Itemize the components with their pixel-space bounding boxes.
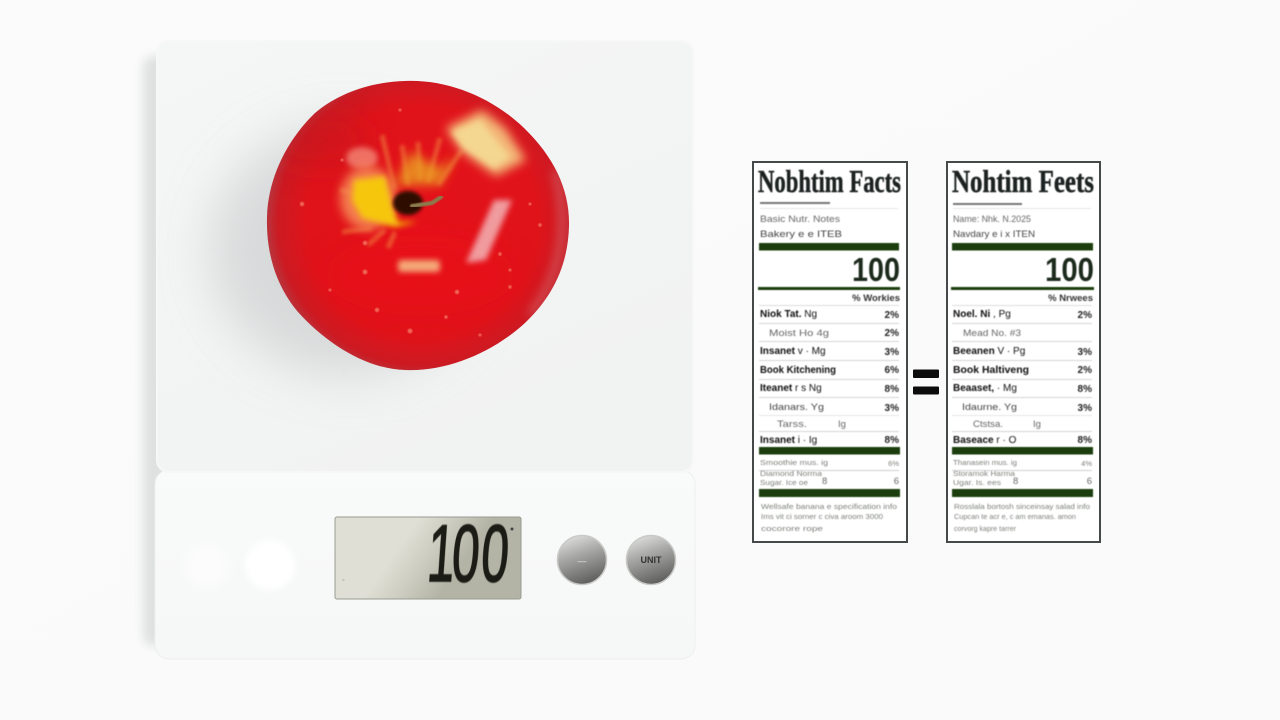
scale base — [155, 470, 695, 659]
apple skin speckles — [300, 108, 542, 336]
nutrition label: right: 2% — [1078, 310, 1092, 321]
nutrition label: left: Bakery e e ITEB — [760, 229, 842, 240]
nutrient rows: Noel. Ni , Pg — [953, 309, 1011, 320]
apple body — [267, 81, 569, 370]
bright lower red — [325, 235, 515, 315]
serving text: Basic Nutr. Notes — [760, 214, 840, 225]
nutrition label: left: 8% — [885, 384, 899, 395]
scale shadow — [143, 56, 173, 646]
unit button: UNIT — [640, 555, 662, 565]
equals sign — [913, 370, 939, 394]
nutrition label: right: Beeanen V · Pg — [953, 346, 1025, 357]
third thick bar — [952, 489, 1093, 497]
weight reading: 100 — [425, 510, 512, 599]
nutrition label: right: 3% — [1078, 347, 1092, 358]
LCD display — [335, 510, 521, 599]
nutrition label: right: Navdary e i x ITEN — [953, 229, 1035, 240]
nutrition label: left: Ims vit ci sorner c civa aroom 3000 — [761, 512, 883, 521]
pink rim right — [530, 170, 562, 315]
thick bar — [759, 243, 899, 250]
left touch button — [245, 540, 295, 590]
nutrition label: left: cocorore rope — [761, 524, 823, 533]
nutrition label: left: 6% — [888, 459, 899, 468]
nutrition label: right: Cupcan te acr e, c am emanas. amon — [954, 512, 1076, 521]
nutrition label: left: 6 — [894, 476, 899, 487]
nutrition label: left: 2% — [885, 310, 899, 321]
nutrition label: left: Insanet v · Mg — [760, 346, 826, 357]
nutrition label: right: Idaurne. Yg — [962, 402, 1017, 413]
thick bar — [952, 243, 1093, 250]
nutrition label: left: 8% — [885, 435, 899, 446]
calories value: 100 — [1045, 251, 1094, 288]
label title: Nohtim Feets — [952, 163, 1094, 199]
serving text: Name: Nhk. N.2025 — [953, 214, 1031, 225]
tare button: — — [578, 556, 586, 566]
weighing platform — [157, 41, 693, 472]
nutrition label: right: 8% — [1078, 384, 1092, 395]
unit button — [626, 536, 676, 584]
nutrition label: left: Diamond Norma — [760, 469, 823, 478]
darker upper left — [278, 102, 362, 166]
display panel — [335, 517, 521, 599]
nutrition label: right: Book Haltiveng — [953, 365, 1029, 376]
nutrition label: right: 4% — [1081, 459, 1092, 468]
golden streak above stem — [395, 152, 456, 185]
label frame — [947, 162, 1100, 542]
orange halo — [340, 166, 396, 230]
horizontal highlight — [398, 260, 440, 272]
nutrition label: right: Mead No. #3 — [963, 328, 1021, 339]
tare button — [558, 536, 606, 584]
nutrition label: left: Book Kitchening — [760, 365, 836, 376]
kitchen scale — [143, 41, 695, 659]
display dot — [510, 528, 514, 530]
apple shadow — [210, 125, 480, 375]
apple stem — [412, 197, 441, 206]
calories value: 100 — [852, 251, 900, 288]
nutrition label: left: Iteanet r s Ng — [760, 383, 822, 394]
daily value heading: % Workies — [852, 293, 900, 304]
nutrition label: left: Moist Ho 4g — [769, 328, 829, 339]
pale pink patch — [346, 147, 378, 169]
apple — [267, 81, 569, 370]
nutrition label: right: 8 — [1013, 476, 1018, 487]
nutrition label: left: 3% — [885, 403, 899, 414]
nutrient rows: Niok Tat. Ng — [760, 309, 817, 320]
diagonal highlight — [466, 200, 512, 263]
footnote: Rosslala bortosh sinceinsay salad info — [954, 502, 1090, 511]
stem cavity — [393, 191, 423, 215]
nutrition label: left: 6% — [885, 365, 899, 376]
nutrition label: left: 3% — [885, 347, 899, 358]
label title: Nobhtim Facts — [758, 163, 901, 199]
third thick bar — [759, 489, 900, 497]
nutrition label: right: 2% — [1078, 365, 1092, 376]
footnote: Wellsafe banana e specification info — [761, 502, 897, 511]
nutrition label: left: Sugar. Ice oe — [760, 478, 808, 487]
vitamin rows: Smoothie mus. ig — [760, 458, 828, 467]
nutrition label: left: 8 — [822, 476, 827, 487]
nutrition label: left: Idanars. Yg — [769, 402, 824, 413]
daily value heading: % Nrwees — [1048, 293, 1093, 304]
second thick bar — [952, 447, 1093, 454]
nutrition label: left: Insanet i · Ig — [760, 435, 817, 446]
nutrition label: right: Ig — [1033, 419, 1041, 430]
nutrition label: right: Storamok Harma — [953, 469, 1016, 478]
nutrition label: right: 8% — [1078, 435, 1092, 446]
nutrition label: left: 2% — [885, 328, 899, 339]
nutrition label: right: Beaaset, · Mg — [953, 383, 1017, 394]
nutrition label: left: Ig — [838, 419, 846, 430]
nutrition label: right: corvorg kapre tarrer — [954, 524, 1016, 533]
display marks: ° — [342, 578, 345, 586]
label frame — [753, 162, 907, 542]
vitamin rows: Thanasein mus. ig — [953, 458, 1017, 467]
nutrition label: right: Baseace r · O — [953, 435, 1017, 446]
nutrition label: right: 6 — [1087, 476, 1092, 487]
nutrition label: right — [947, 162, 1100, 542]
nutrition label: right: Ugar. Is. ees — [953, 478, 1001, 487]
nutrition label: left: Tarss. — [777, 419, 807, 430]
radial streaks — [340, 135, 462, 248]
cream blush patch — [446, 110, 526, 176]
yellow stem patch — [352, 176, 418, 227]
nutrition label: right: Ctstsa. — [973, 419, 1003, 430]
second thick bar — [759, 447, 900, 454]
nutrition label: left — [753, 162, 907, 542]
second touch button — [185, 544, 229, 588]
nutrition label: right: 3% — [1078, 403, 1092, 414]
